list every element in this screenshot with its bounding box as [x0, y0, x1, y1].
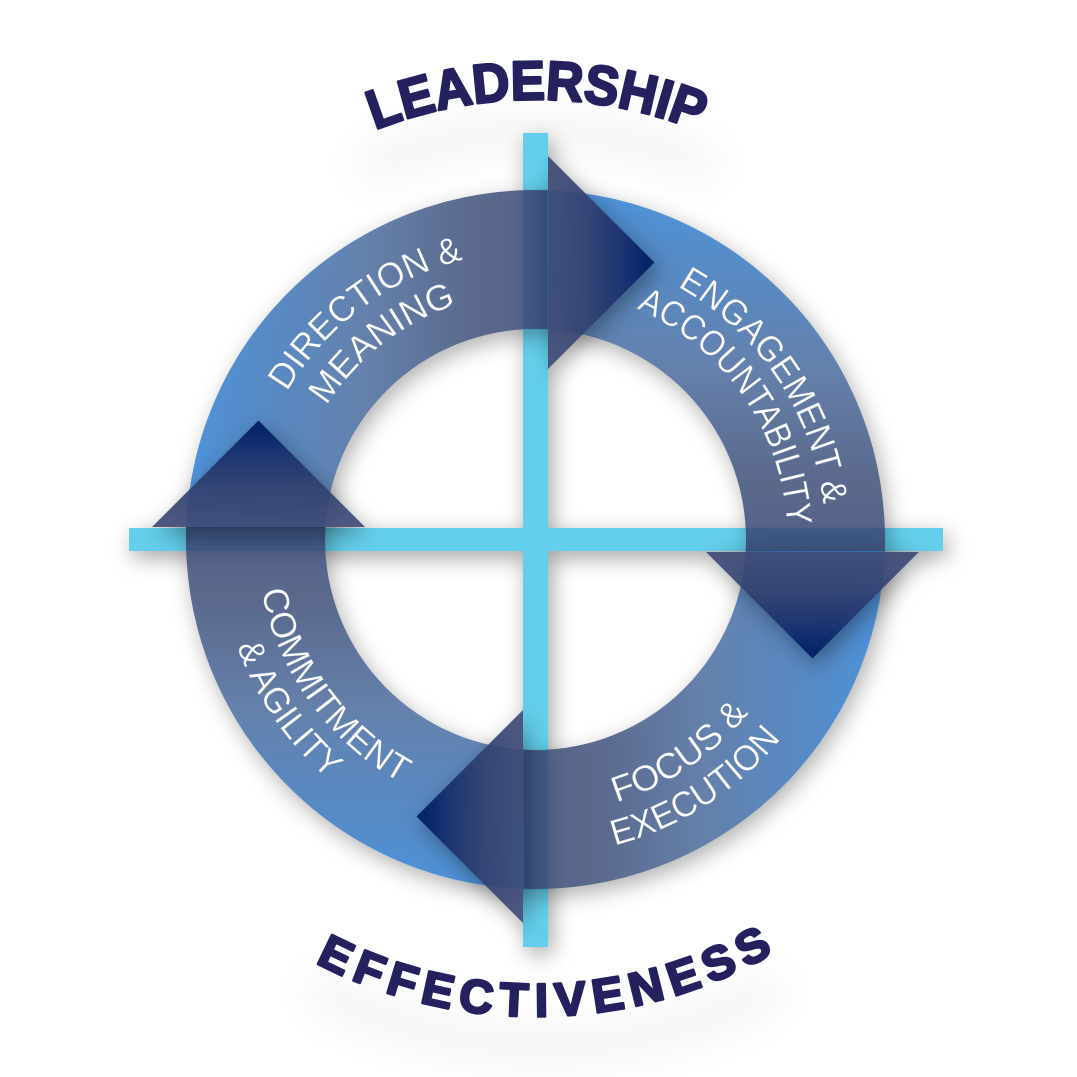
ring bands — [186, 190, 885, 889]
label: engagement and accountability: ENGAGEMENT & — [680, 266, 846, 504]
title: leadership: LEADERSHIP — [364, 60, 708, 130]
band: engagement and accountability — [547, 190, 885, 552]
arrowhead: right, pointing down — [706, 552, 919, 658]
bar crossings over the ring — [186, 190, 886, 890]
label: engagement and accountability: ACCOUNTABILITY — [636, 290, 812, 522]
band: focus and execution — [523, 551, 885, 889]
crosshair bars — [129, 133, 943, 947]
title: effectiveness: EFFECTIVENESS — [316, 928, 770, 1018]
label: direction and meaning: MEANING — [308, 284, 452, 404]
label: focus and execution: FOCUS & — [611, 703, 748, 802]
label: focus and execution: EXECUTION — [610, 724, 780, 845]
label: commitment and agility: COMMITMENT — [264, 589, 413, 778]
label: direction and meaning: DIRECTION & — [268, 238, 463, 390]
arrowheads — [152, 156, 919, 923]
label: commitment and agility: & AGILITY — [238, 644, 344, 773]
band: commitment and agility — [186, 527, 524, 889]
band: direction and meaning — [186, 190, 548, 528]
arrowhead: left, pointing up — [152, 420, 365, 527]
arrowhead: top, pointing right — [548, 156, 654, 369]
arrowhead: bottom, pointing left — [416, 710, 523, 923]
